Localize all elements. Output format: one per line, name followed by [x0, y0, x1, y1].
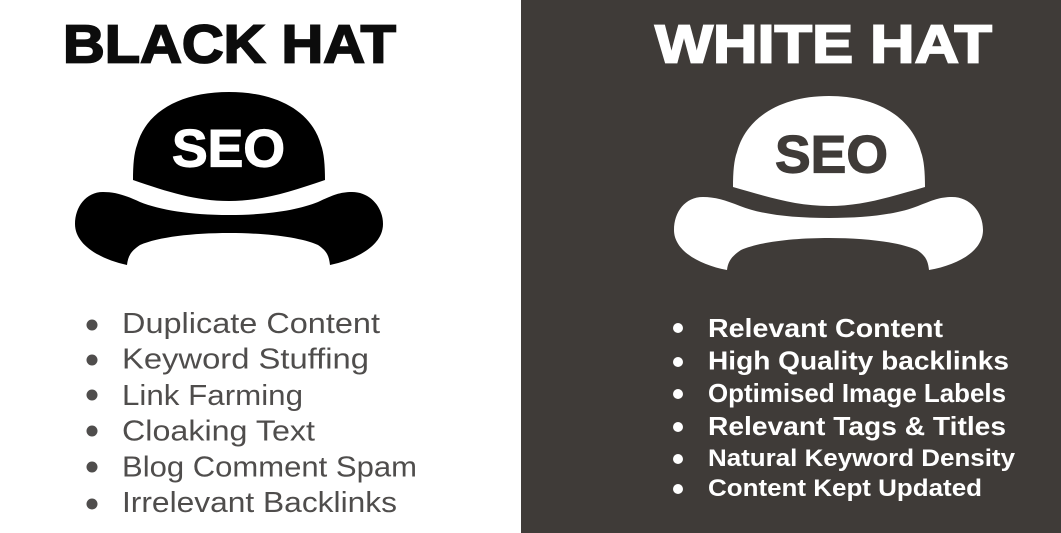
list item: Duplicate Content: Duplicate Content	[122, 308, 380, 340]
list item: Optimised Image Labels: Optimised Image Labels	[708, 378, 1006, 408]
list item: Content Kept Updated: Content Kept Updated	[708, 475, 982, 502]
panel: white hat background	[521, 0, 1061, 533]
list: black hat tactics	[86, 308, 417, 519]
list item: Natural Keyword Density: Natural Keyword Density	[708, 445, 1016, 472]
list item: Keyword Stuffing: Keyword Stuffing	[122, 344, 369, 376]
icon: white hat	[674, 96, 983, 270]
list item: High Quality backlinks: High Quality backlinks	[708, 346, 1009, 376]
list: white hat tactics	[673, 313, 1016, 502]
hat label: SEO: SEO	[172, 120, 285, 178]
list item: Relevant Content: Relevant Content	[708, 313, 943, 343]
list item: Blog Comment Spam: Blog Comment Spam	[122, 452, 417, 484]
list item: Irrelevant Backlinks: Irrelevant Backlinks	[122, 487, 397, 519]
list item: Cloaking Text: Cloaking Text	[122, 416, 315, 448]
list item: Relevant Tags & Titles: Relevant Tags & Titles	[708, 411, 1006, 441]
icon: black hat	[75, 92, 383, 265]
list item: Link Farming: Link Farming	[122, 380, 303, 412]
hat label: SEO: SEO	[775, 126, 888, 184]
heading: black hat: BLACK HAT	[63, 14, 396, 74]
heading: white hat: WHITE HAT	[655, 14, 992, 74]
